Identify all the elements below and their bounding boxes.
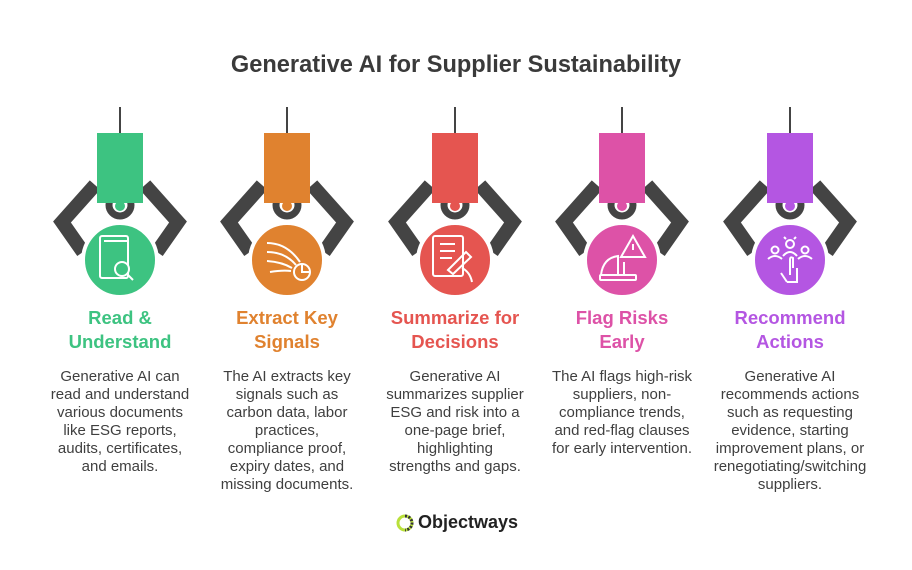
heading 1: Read & [88,307,152,328]
claw 1: read & understand [62,107,178,297]
text 1: like ESG reports, [63,422,177,439]
text 4: and red-flag clauses [554,422,690,439]
text 1 [51,368,189,475]
heading 5: Actions [756,331,824,352]
text 3 [386,368,524,475]
logo text: Objectways [418,512,518,532]
text 1: and emails. [82,458,158,475]
text 4: compliance trends, [559,404,685,421]
heading 1: Understand [69,331,171,352]
title: Generative AI for Supplier Sustainability [231,52,681,78]
text 5: suppliers. [758,476,822,493]
text 3: highlighting [417,440,493,457]
text 3: summarizes supplier [386,386,524,403]
text 2: practices, [255,422,319,439]
text 3: strengths and gaps. [389,458,521,475]
text 1: various documents [57,404,183,421]
heading 5: Recommend [734,307,846,328]
text 5: such as requesting [727,404,853,421]
text 4 [552,368,692,457]
heading 2 [236,307,338,352]
text 4: suppliers, non- [573,386,671,403]
text 2 [221,368,353,493]
text 1: read and understand [51,386,189,403]
heading 3: Summarize for [391,307,519,328]
claw 5: recommend [732,107,848,297]
text 1: Generative AI can [60,368,180,385]
heading 5 [734,307,846,352]
heading 4 [576,307,668,352]
text 3: one-page brief, [405,422,505,439]
text 2: missing documents. [221,476,353,493]
text 3: ESG and risk into a [390,404,520,421]
text 2: carbon data, labor [227,404,347,421]
text 5: recommends actions [721,386,859,403]
icon: signals [267,243,310,280]
text 5 [714,368,866,493]
heading 4: Early [599,331,645,352]
text 5: evidence, starting [731,422,849,439]
text 2: The AI extracts key [223,368,351,385]
text 2: expiry dates, and [230,458,344,475]
icon: people pointing [768,237,812,282]
icon: book search [100,236,133,280]
text 5: Generative AI [745,368,835,385]
heading 3: Decisions [411,331,499,352]
text 4: The AI flags high-risk [552,368,692,385]
text 1: audits, certificates, [58,440,182,457]
text 4: for early intervention. [552,440,692,457]
text 2: signals such as [236,386,338,403]
text 2: compliance proof, [228,440,346,457]
text 3: Generative AI [410,368,500,385]
icon: warning ship [600,236,645,280]
text 5: improvement plans, or [716,440,864,457]
heading 1 [69,307,171,352]
claw 3: summarize [397,107,513,297]
logo icon [398,516,412,530]
heading 2: Signals [254,331,320,352]
claw 2: extract [229,107,345,297]
claw 4: flag risks [564,107,680,297]
text 5: renegotiating/switching [714,458,866,475]
icon: document pen [433,236,472,282]
heading 3 [391,307,519,352]
heading 4: Flag Risks [576,307,668,328]
heading 2: Extract Key [236,307,338,328]
